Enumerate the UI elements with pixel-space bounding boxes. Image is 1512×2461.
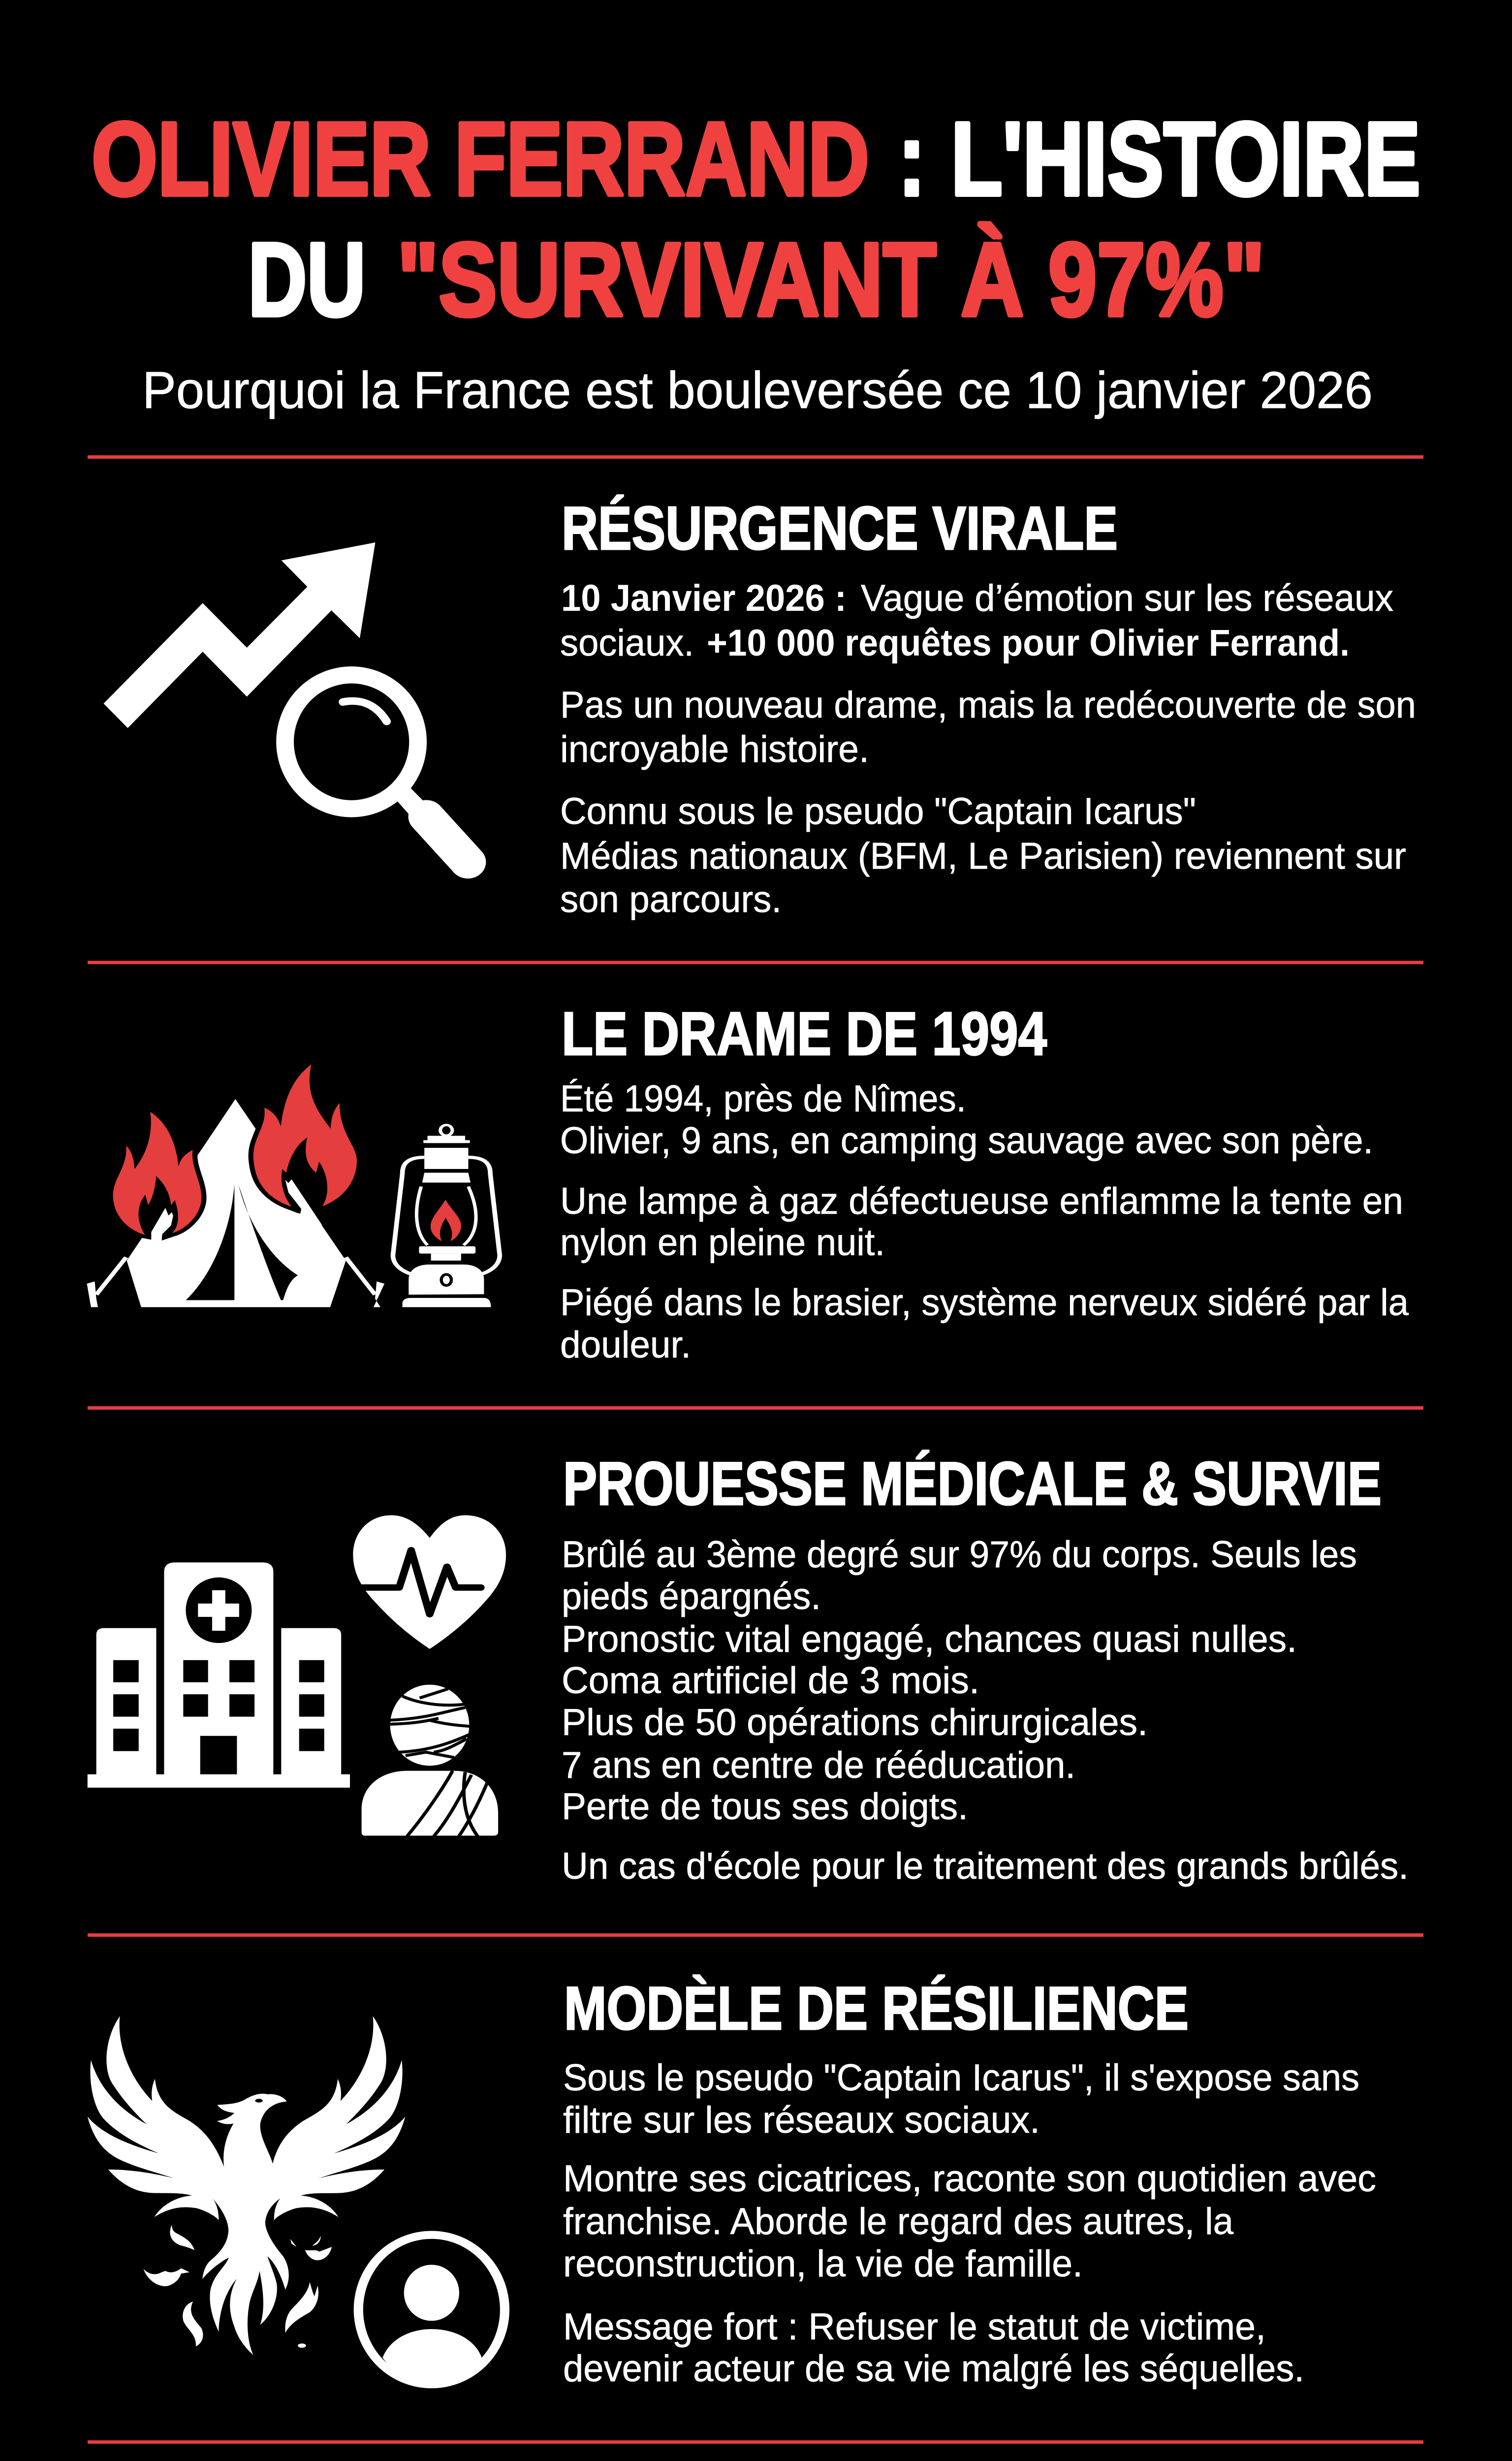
- text block: Connu sous le pseudo "Captain Icarus": [560, 790, 1196, 832]
- text block: Été 1994, près de Nîmes.: [560, 1078, 966, 1120]
- icon: rising arrow and magnifying glass: [103, 542, 468, 862]
- icon: gas lantern: [393, 1125, 500, 1307]
- title: OLIVIER FERRAND: [92, 100, 869, 217]
- heading: LE DRAME DE 1994: [562, 1000, 1047, 1068]
- icon: hospital: [88, 1562, 350, 1788]
- text block: Brûlé au 3ème degré sur 97% du corps. Seuls les: [562, 1534, 1357, 1576]
- subtitle: Pourquoi la France est bouleversée ce 10 janvier 2026: [142, 361, 1373, 419]
- text block: Piégé dans le brasier, système nerveux sidéré par la: [560, 1282, 1409, 1324]
- text block: Un cas d'école pour le traitement des grands brûlés.: [562, 1845, 1409, 1887]
- text block: [563, 2057, 1376, 2390]
- icon: heart with pulse: [353, 1515, 506, 1649]
- text block: Perte de tous ses doigts.: [562, 1786, 968, 1828]
- title: :: [898, 100, 925, 217]
- text block: filtre sur les réseaux sociaux.: [563, 2099, 1040, 2141]
- text block: [560, 577, 1416, 920]
- text block: Montre ses cicatrices, raconte son quotidien avec: [563, 2158, 1376, 2200]
- text block: sociaux.: [560, 622, 694, 664]
- icon: phoenix: [88, 2016, 405, 2355]
- text block: Coma artificiel de 3 mois.: [562, 1660, 979, 1702]
- text block: devenir acteur de sa vie malgré les séquelles.: [563, 2348, 1304, 2390]
- text block: Pas un nouveau drame, mais la redécouverte de son: [560, 684, 1416, 726]
- panel: prouesse médicale et survie: [88, 1450, 1409, 1887]
- text block: incroyable histoire.: [560, 728, 869, 770]
- text block: [560, 1078, 1409, 1366]
- panel: résurgence virale: [103, 495, 1416, 920]
- text block: Vague d’émotion sur les réseaux: [861, 577, 1393, 619]
- text block: Plus de 50 opérations chirurgicales.: [562, 1702, 1148, 1743]
- icon: burning tent: [87, 1064, 384, 1307]
- panel: le drame de 1994: [87, 1000, 1409, 1366]
- text block: Pronostic vital engagé, chances quasi nulles.: [562, 1618, 1297, 1660]
- text block: Sous le pseudo "Captain Icarus", il s'expose sans: [563, 2057, 1359, 2099]
- text block: Une lampe à gaz défectueuse enflamme la tente en: [560, 1180, 1403, 1222]
- heading: MODÈLE DE RÉSILIENCE: [564, 1975, 1189, 2043]
- text block: reconstruction, la vie de famille.: [563, 2243, 1083, 2285]
- text block: douleur.: [560, 1324, 691, 1366]
- text block: 10 Janvier 2026 :: [561, 577, 847, 619]
- text block: nylon en pleine nuit.: [560, 1222, 885, 1263]
- title: DU: [248, 221, 366, 338]
- text block: Médias nationaux (BFM, Le Parisien) reviennent sur: [560, 835, 1406, 877]
- text block: franchise. Aborde le regard des autres, la: [563, 2201, 1234, 2242]
- text block: 7 ans en centre de rééducation.: [562, 1744, 1075, 1786]
- heading: RÉSURGENCE VIRALE: [562, 495, 1118, 563]
- text block: Olivier, 9 ans, en camping sauvage avec son père.: [560, 1120, 1373, 1162]
- title: [92, 100, 1420, 338]
- text block: [562, 1534, 1409, 1887]
- panel: modèle de résilience: [88, 1975, 1376, 2390]
- text block: Message fort : Refuser le statut de victime,: [563, 2306, 1266, 2348]
- icon: profile avatar: [354, 2231, 509, 2388]
- text block: +10 000 requêtes pour Olivier Ferrand.: [707, 622, 1350, 664]
- title: "SURVIVANT À 97%": [397, 221, 1265, 338]
- text block: pieds épargnés.: [562, 1576, 821, 1617]
- icon: bandaged patient: [362, 1685, 498, 1836]
- text block: son parcours.: [560, 879, 782, 920]
